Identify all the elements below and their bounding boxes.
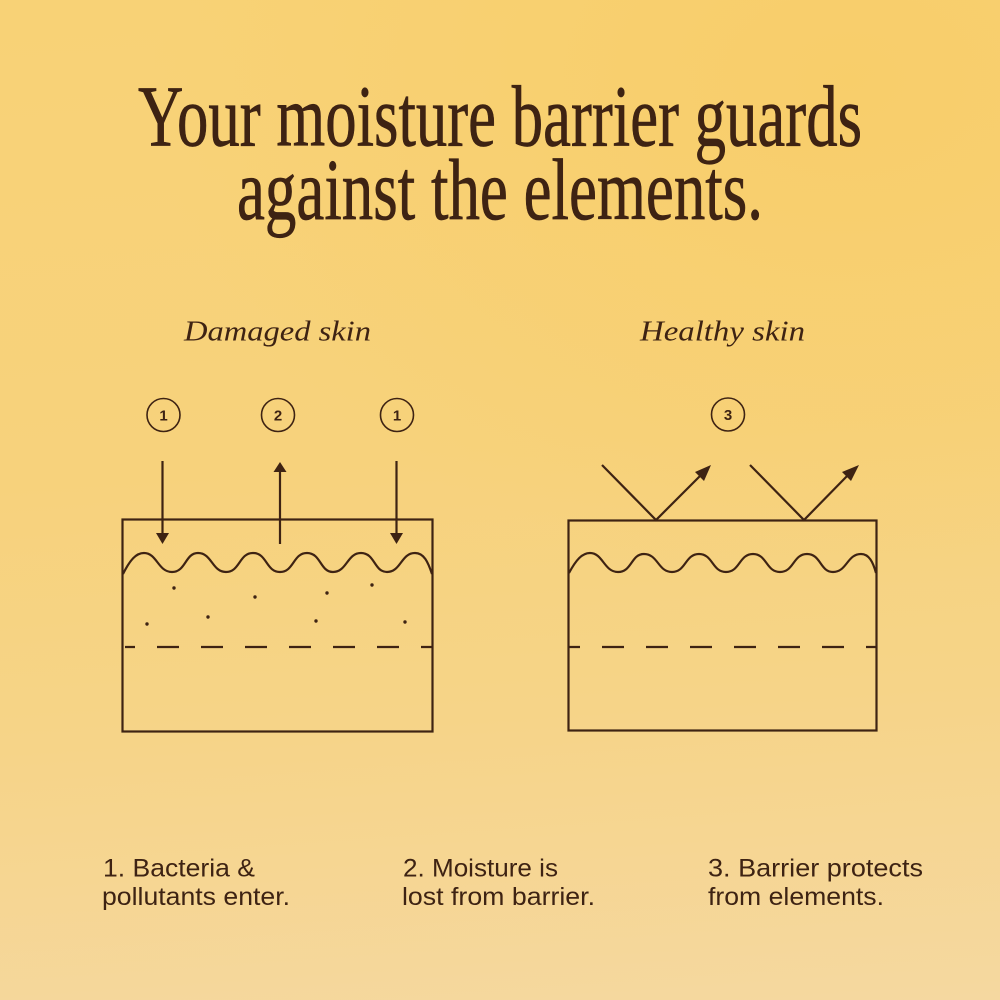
marker 2: 2 (274, 408, 282, 424)
text: note 3: from elements. (708, 883, 884, 911)
panel: damaged skin diagram (122, 398, 432, 732)
arrow: right inward (390, 461, 403, 544)
skin box (122, 520, 432, 732)
title (138, 68, 862, 238)
dashed layer line (125, 646, 432, 648)
marker 1 (147, 398, 180, 432)
title: against the elements. (237, 141, 763, 238)
marker 1 (380, 398, 414, 432)
heading: damaged skin: Damaged skin (183, 316, 371, 348)
wavy barrier line (123, 553, 432, 574)
marker 3 (712, 398, 744, 431)
moisture dots (145, 583, 407, 626)
marker 1: 1 (393, 408, 401, 424)
marker 3: 3 (724, 407, 732, 424)
dashed layer line (569, 646, 876, 648)
marker 1: 1 (159, 408, 168, 424)
arrow: left deflected (602, 465, 711, 520)
text: note 2: lost from barrier. (402, 883, 595, 911)
text: note 1 (102, 854, 290, 911)
arrow: left inward (156, 461, 169, 544)
text: note 2 (402, 854, 595, 911)
wavy barrier line (569, 553, 876, 573)
arrow: right deflected (750, 465, 859, 520)
arrow: centre outward (274, 462, 286, 544)
heading: healthy skin: Healthy skin (639, 316, 805, 348)
text: note 2: 2. Moisture is (403, 854, 558, 882)
panel: healthy skin diagram (568, 398, 876, 730)
text: note 3: 3. Barrier protects (708, 854, 923, 882)
text: note 3 (708, 854, 923, 911)
marker 2 (262, 398, 294, 432)
skin box (568, 520, 876, 730)
text: note 1: pollutants enter. (102, 883, 290, 911)
text: note 1: 1. Bacteria & (103, 854, 255, 882)
